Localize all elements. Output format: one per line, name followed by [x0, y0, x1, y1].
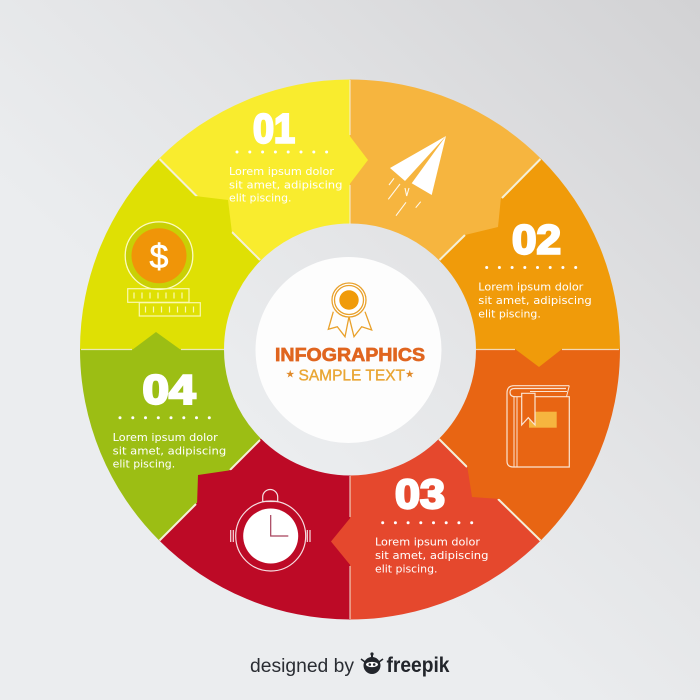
- segment: orange: [439, 159, 620, 350]
- arrow tab: red into crimson: [331, 517, 351, 566]
- block 04: sit amet, adipiscing: [113, 444, 226, 457]
- arrow tab: orange into dark orange: [515, 349, 562, 367]
- arrow tab: light orange into orange: [463, 197, 501, 235]
- icon: dollar coin and stacks: [125, 222, 200, 316]
- subtitle: ★: [286, 368, 295, 380]
- segment: red: [350, 439, 541, 620]
- segment: green: [80, 350, 261, 540]
- arrow tab: green into lime: [132, 332, 181, 350]
- segment: dark orange: [439, 350, 620, 540]
- icon: dollar coin and stacks: $: [150, 238, 169, 276]
- subtitle: SAMPLE TEXT: [298, 368, 405, 384]
- block 01: sit amet, adipiscing: [229, 178, 342, 191]
- block 04: [113, 366, 226, 471]
- credit: designed by freepik: [250, 652, 450, 677]
- block 03: 03: [395, 471, 445, 517]
- icon: paper plane: [388, 136, 446, 216]
- block 02: 02: [512, 216, 561, 262]
- credit: designed by freepik: freepik: [386, 654, 450, 677]
- block 04: elit piscing.: [113, 458, 175, 471]
- title: INFOGRAPHICS: [275, 344, 425, 365]
- icon: stopwatch: [231, 490, 310, 571]
- block 01: Lorem ipsum dolor: [229, 165, 335, 178]
- block 03: [375, 471, 488, 575]
- block 01: 01: [253, 106, 295, 152]
- segment: light orange: [350, 80, 541, 260]
- icon: freepik logo: [361, 652, 383, 674]
- segment: yellow: [159, 80, 350, 260]
- arrow tab: crimson into green: [197, 470, 232, 506]
- arrow tab: lime into yellow: [195, 196, 232, 233]
- circular wheel of eight segments: [80, 80, 620, 620]
- block 04: Lorem ipsum dolor: [113, 431, 218, 444]
- icon: book: [507, 386, 569, 467]
- arrow tab: yellow into light orange: [349, 135, 368, 185]
- block 04: 04: [142, 366, 196, 412]
- block 03: Lorem ipsum dolor: [375, 536, 481, 549]
- block 03: sit amet, adipiscing: [375, 549, 488, 562]
- icon: award ribbon: [328, 283, 372, 337]
- block 02: elit piscing.: [478, 307, 541, 320]
- arrow tab: dark orange into red: [467, 465, 500, 499]
- block 02: Lorem ipsum dolor: [478, 281, 584, 294]
- center white circle: [256, 257, 442, 443]
- subtitle: ★: [405, 368, 414, 380]
- block 02: sit amet, adipiscing: [478, 294, 592, 307]
- credit: designed by freepik: designed by: [250, 656, 355, 677]
- segment: lime: [80, 159, 261, 350]
- block 01: [229, 106, 342, 205]
- block 03: elit piscing.: [375, 562, 438, 575]
- block 01: elit piscing.: [229, 192, 292, 205]
- segment: crimson: [159, 439, 350, 620]
- block 02: [478, 216, 592, 320]
